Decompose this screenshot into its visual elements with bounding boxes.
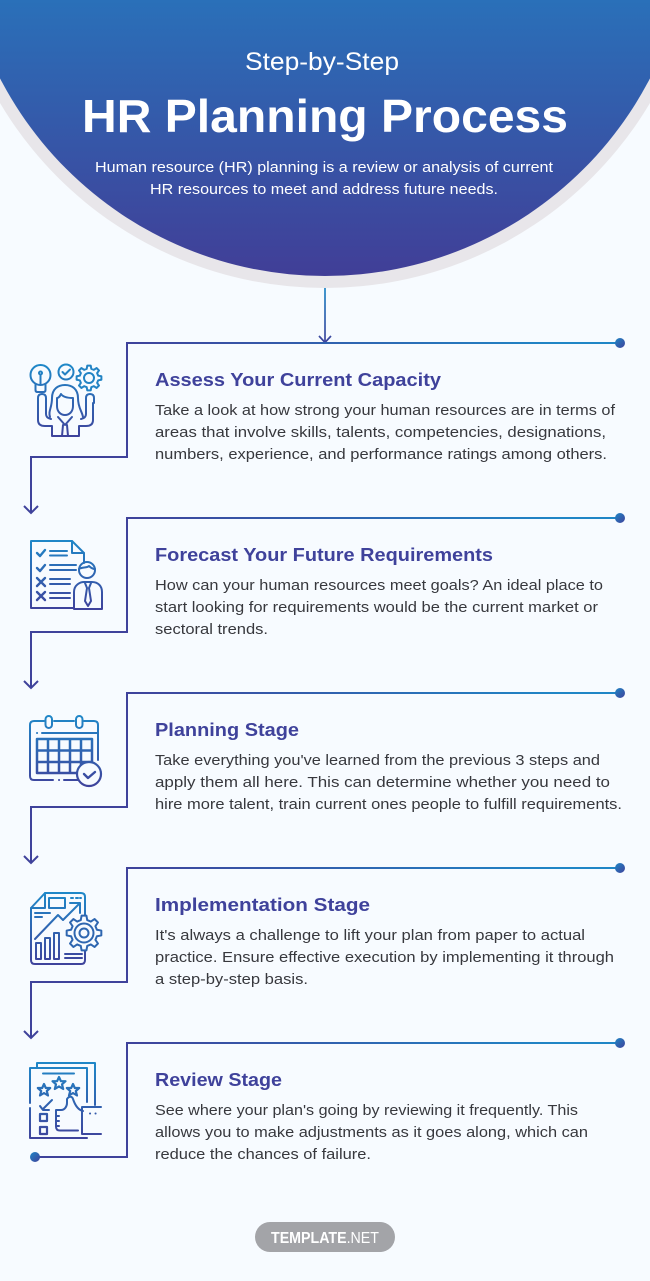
body text xyxy=(155,402,616,463)
heading: Forecast Your Future Requirements xyxy=(155,544,493,565)
body text: Take everything you've learned from the previous 3 steps and xyxy=(155,752,600,769)
body text: It's always a challenge to lift your plan from paper to actual xyxy=(155,927,585,944)
heading: Assess Your Current Capacity xyxy=(155,369,442,390)
connector 4 xyxy=(24,863,625,1038)
body text xyxy=(155,752,622,813)
panel: step 4 xyxy=(24,863,625,1038)
connector 2 xyxy=(24,513,625,688)
heading: Planning Stage xyxy=(155,719,299,740)
body text xyxy=(155,1102,588,1163)
body text: sectoral trends. xyxy=(155,621,268,638)
icon: review with stars and thumbs up xyxy=(30,1063,101,1138)
header semicircle xyxy=(0,0,650,288)
arrow from header to step 1 xyxy=(319,288,331,342)
panel: step 5 xyxy=(30,1038,625,1163)
panel: step 1 xyxy=(24,338,625,513)
body text: hire more talent, train current ones people to fulfill requirements. xyxy=(155,796,622,813)
body text: See where your plan's going by reviewing it frequently. This xyxy=(155,1102,578,1119)
body text: reduce the chances of failure. xyxy=(155,1146,371,1163)
body text: practice. Ensure effective execution by implementing it through xyxy=(155,949,614,966)
body text: a step-by-step basis. xyxy=(155,971,308,988)
body text: allows you to make adjustments as it goes along, which can xyxy=(155,1124,588,1141)
connector 3 xyxy=(24,688,625,863)
intro text: Human resource (HR) planning is a review or analysis of current xyxy=(95,159,554,176)
footer logo xyxy=(255,1222,395,1252)
body text: How can your human resources meet goals? An ideal place to xyxy=(155,577,603,594)
body text xyxy=(155,927,614,988)
heading: Review Stage xyxy=(155,1069,282,1090)
panel: step 2 xyxy=(24,513,625,688)
intro text: HR resources to meet and address future needs. xyxy=(150,181,498,198)
icon: person with ideas xyxy=(30,364,101,436)
body text: start looking for requirements would be the current market or xyxy=(155,599,598,616)
heading: Implementation Stage xyxy=(155,894,370,915)
intro text xyxy=(95,159,554,198)
body text xyxy=(155,577,603,638)
body text: Take a look at how strong your human resources are in terms of xyxy=(155,402,616,419)
panel: step 3 xyxy=(24,688,625,863)
icon: report with chart and gear xyxy=(31,893,101,964)
body text: apply them all here. This can determine whether you need to xyxy=(155,774,610,791)
eyebrow: Step-by-Step: Step-by-Step xyxy=(245,48,399,76)
body text: numbers, experience, and performance ratings among others. xyxy=(155,446,607,463)
icon: checklist with person xyxy=(31,541,102,609)
icon: calendar with check xyxy=(30,716,101,786)
footer logo: TEMPLATE.NET xyxy=(271,1230,379,1247)
connector 1 xyxy=(24,338,625,513)
body text: areas that involve skills, talents, competencies, designations, xyxy=(155,424,606,441)
title: HR Planning Process xyxy=(82,90,568,142)
connector 5 xyxy=(30,1038,625,1162)
